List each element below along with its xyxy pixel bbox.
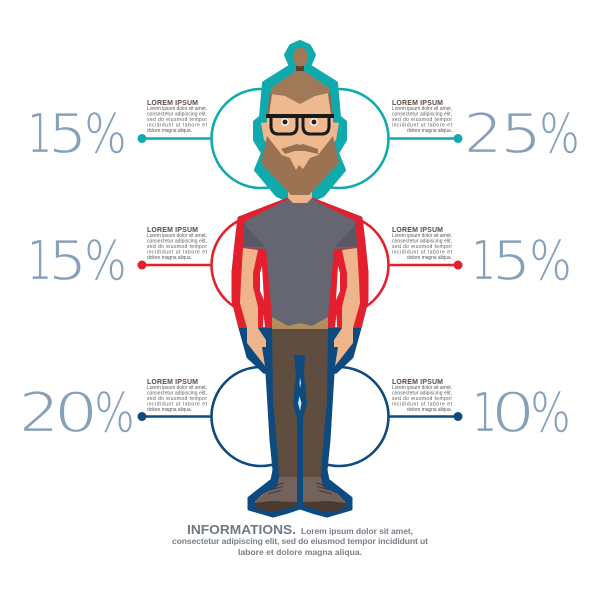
text block middle right: dolore magna aliqua.	[407, 255, 452, 261]
percent 15% top left: %	[84, 102, 126, 167]
text block middle left: Lorem ipsum dolor sit amet,	[147, 233, 207, 239]
text block top right: incididunt ut labore et	[392, 122, 453, 128]
hair bun	[293, 48, 308, 66]
text block bottom left	[147, 379, 208, 413]
percent 10% bottom right: 1	[472, 381, 497, 446]
text block bottom right: dolore magna aliqua.	[407, 407, 452, 413]
text block middle right	[392, 227, 453, 261]
body red outline	[232, 198, 368, 328]
belt	[272, 316, 328, 329]
text block middle right: LOREM IPSUM	[392, 227, 443, 234]
text block bottom right	[392, 379, 453, 413]
text block bottom right: sed do eiusmod tempor	[392, 396, 452, 402]
text block middle left: LOREM IPSUM	[147, 227, 198, 234]
text block bottom left: Lorem ipsum dolor sit amet,	[147, 385, 207, 391]
percent 15% middle left: %	[84, 229, 126, 294]
percent 20% bottom left	[18, 381, 134, 446]
text block top right: LOREM IPSUM	[392, 100, 443, 107]
percent 15% middle left: 5	[48, 229, 87, 294]
left arm	[240, 248, 266, 366]
neck	[288, 188, 312, 203]
pants	[272, 329, 328, 477]
crotch slit	[293, 355, 307, 480]
text block middle right: sed do eiusmod tempor	[392, 244, 452, 250]
percent 25% top right: 5	[500, 102, 542, 167]
hair sideburns	[267, 92, 333, 115]
text block top right: dolore magna aliqua.	[407, 128, 452, 134]
percent 20% bottom left: %	[94, 381, 134, 446]
text block top left: dolore magna aliqua.	[147, 128, 192, 134]
text block top left: Lorem ipsum dolor sit amet,	[147, 106, 207, 112]
text block top right: consectetur adipiscing elit,	[392, 112, 452, 118]
text block middle left: incididunt ut labore et	[147, 250, 208, 256]
left boot	[255, 477, 297, 512]
text block top left: sed do eiusmod tempor	[147, 117, 207, 123]
beard	[261, 136, 339, 195]
text block middle left	[147, 227, 208, 261]
text block top right	[392, 100, 453, 134]
percent 15% middle right: 5	[492, 229, 531, 294]
hair	[271, 71, 329, 104]
text block top left	[147, 100, 208, 134]
percent 15% middle left	[27, 229, 126, 294]
percent 15% middle right	[471, 229, 572, 294]
text block top left: LOREM IPSUM	[147, 100, 198, 107]
text block top right: sed do eiusmod tempor	[392, 117, 452, 123]
head teal outline	[255, 42, 345, 200]
percent 15% top left	[27, 102, 126, 167]
percent 25% top right: 2	[463, 102, 503, 167]
crotch highlights	[298, 378, 302, 411]
footer text: INFORMATIONS.	[187, 523, 296, 537]
text block bottom left: LOREM IPSUM	[147, 379, 198, 386]
text block bottom right: consectetur adipiscing elit,	[392, 390, 452, 396]
text block top left: consectetur adipiscing elit,	[147, 112, 207, 118]
percent 10% bottom right: %	[530, 381, 570, 446]
text block bottom right: incididunt ut labore et	[392, 402, 453, 408]
text block middle left: sed do eiusmod tempor	[147, 244, 207, 250]
percent 15% middle right: 1	[471, 229, 496, 294]
percent 15% middle right: %	[530, 229, 572, 294]
text block bottom left: incididunt ut labore et	[147, 402, 208, 408]
arm gaps	[260, 266, 340, 327]
percent 15% middle left: 1	[27, 229, 52, 294]
ears	[261, 122, 339, 148]
text block bottom left: consectetur adipiscing elit,	[147, 390, 207, 396]
footer text: consectetur adipiscing elit, sed do eiusmod tempor incididunt ut	[172, 536, 428, 546]
text block middle left: dolore magna aliqua.	[147, 255, 192, 261]
hair band	[296, 66, 304, 71]
red connector and circles	[138, 216, 462, 314]
text block middle right: Lorem ipsum dolor sit amet,	[392, 233, 452, 239]
percent 10% bottom right	[472, 381, 570, 446]
percent 20% bottom left: 2	[18, 381, 60, 446]
text block bottom right: LOREM IPSUM	[392, 379, 443, 386]
percent 25% top right: %	[540, 102, 580, 167]
percent 25% top right	[463, 102, 580, 167]
text block middle right: consectetur adipiscing elit,	[392, 238, 452, 244]
character figure	[233, 42, 367, 516]
face	[267, 92, 333, 172]
text block middle left: consectetur adipiscing elit,	[147, 238, 207, 244]
text block top right: Lorem ipsum dolor sit amet,	[392, 106, 452, 112]
sleeve shading	[243, 224, 357, 247]
moustache	[281, 144, 318, 154]
body blue outline	[233, 199, 367, 516]
footer text	[172, 523, 428, 557]
right boot	[303, 477, 345, 512]
text block bottom right: Lorem ipsum dolor sit amet,	[392, 385, 452, 391]
blue connector and circles	[138, 367, 462, 466]
footer text: Lorem ipsum dolor sit amet,	[301, 526, 413, 536]
shirt	[243, 199, 357, 326]
percent 15% top left: 1	[27, 102, 52, 167]
right arm	[334, 248, 360, 366]
footer text: labore et dolore magna aliqua.	[238, 547, 362, 557]
percent 10% bottom right: 0	[491, 381, 535, 446]
percent 15% top left: 5	[48, 102, 87, 167]
glasses	[266, 114, 334, 134]
text block bottom left: dolore magna aliqua.	[147, 407, 192, 413]
percent 20% bottom left: 0	[54, 381, 98, 446]
text block top left: incididunt ut labore et	[147, 122, 208, 128]
text block bottom left: sed do eiusmod tempor	[147, 396, 207, 402]
text block middle right: incididunt ut labore et	[392, 250, 453, 256]
teal connector and circles	[138, 89, 462, 188]
